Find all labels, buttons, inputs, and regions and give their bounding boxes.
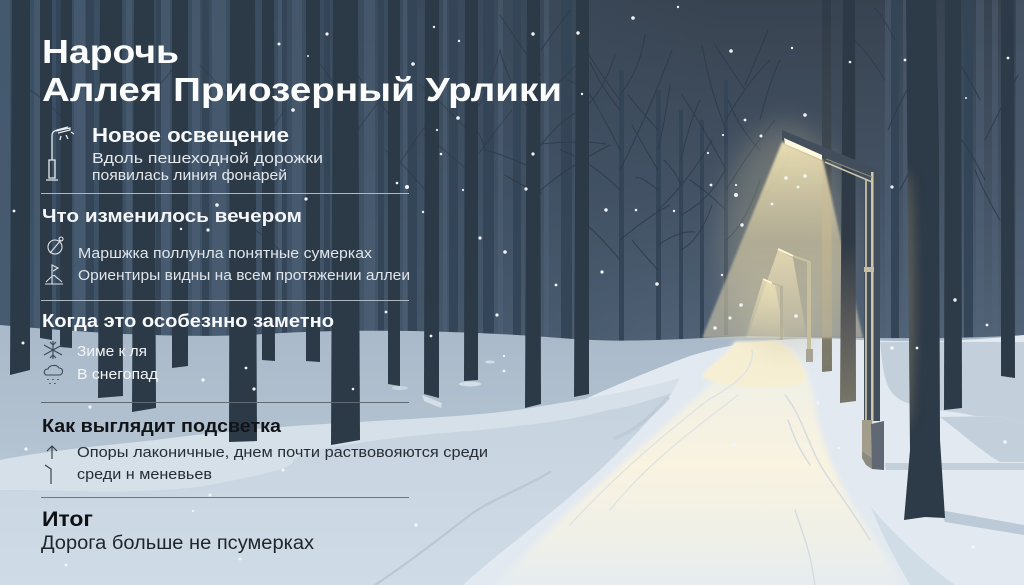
mid-distance tree trunks — [56, 0, 973, 375]
main street lamp — [782, 130, 884, 470]
section: new lighting: Вдоль пешеходной дорожки — [92, 150, 323, 167]
ski tracks on the path — [570, 350, 870, 585]
distant haze of pale trunks — [0, 0, 1024, 345]
snow caps at trunk bases — [392, 360, 495, 408]
ski-track shadows on left snow — [375, 398, 668, 585]
section: evening changes: Что изменилось вечером — [42, 206, 302, 226]
title: Аллея Приозерный Урлики — [42, 71, 562, 108]
section: new lighting: Новое освещение — [92, 125, 289, 147]
icon: flag on hill — [45, 265, 63, 284]
section: evening changes: Маршжка поллунла понятные сумерках — [78, 246, 373, 262]
section: how the lighting looks: Как выглядит подсветка — [42, 416, 282, 436]
dusk sky background — [0, 0, 1024, 345]
bare winter branches — [30, 8, 1018, 270]
dark foreground trunks, left and centre — [10, 0, 589, 445]
section: new lighting — [46, 125, 323, 184]
distant street lamp two — [747, 249, 813, 362]
light cone of main lamp — [702, 142, 863, 338]
icon: lamp post — [45, 465, 51, 484]
warm-lit nearby trunk behind cone — [822, 0, 832, 372]
icon: arrow up — [47, 446, 57, 459]
background lamp glow — [723, 125, 847, 355]
icon: snow cloud — [44, 365, 63, 384]
section: how the lighting looks — [42, 416, 488, 484]
section: how the lighting looks: среди н меневьев — [77, 467, 212, 483]
pale snow strip on left — [0, 378, 680, 492]
section: when noticeable: Когда это особезнно заметно — [42, 311, 334, 331]
foreground left snow — [0, 393, 672, 585]
title: Нарочь — [42, 33, 179, 70]
section: summary: Дорога больше не псумерках — [41, 533, 315, 554]
section: evening changes — [42, 206, 410, 284]
section: when noticeable: В снегопад — [77, 367, 159, 383]
icon: street lamp — [46, 127, 74, 180]
snow ground, far field — [0, 325, 1024, 585]
distant street lamp three — [745, 279, 785, 340]
section: when noticeable — [42, 311, 334, 384]
section: evening changes: Ориентиры видны на всем протяжении аллеи — [78, 268, 410, 284]
dark foreground trunks, right — [898, 0, 1015, 520]
icon: snowflake — [44, 341, 62, 359]
section: how the lighting looks: Опоры лаконичные, днем почти раствовояются среди — [77, 445, 488, 461]
section: summary — [41, 508, 315, 554]
warm pool of light on path — [702, 340, 806, 387]
lit footpath — [490, 342, 905, 585]
title — [42, 33, 562, 108]
divider lines — [41, 194, 409, 498]
icon: compass — [48, 237, 63, 254]
right snow bank — [340, 335, 1024, 585]
warm-lit trunk beside the lamp — [840, 0, 856, 403]
section: new lighting: появилась линия фонарей — [92, 167, 287, 184]
section: when noticeable: Зиме к ля — [77, 344, 147, 360]
right side snow shadows — [871, 342, 1024, 585]
section: summary: Итог — [42, 508, 93, 531]
